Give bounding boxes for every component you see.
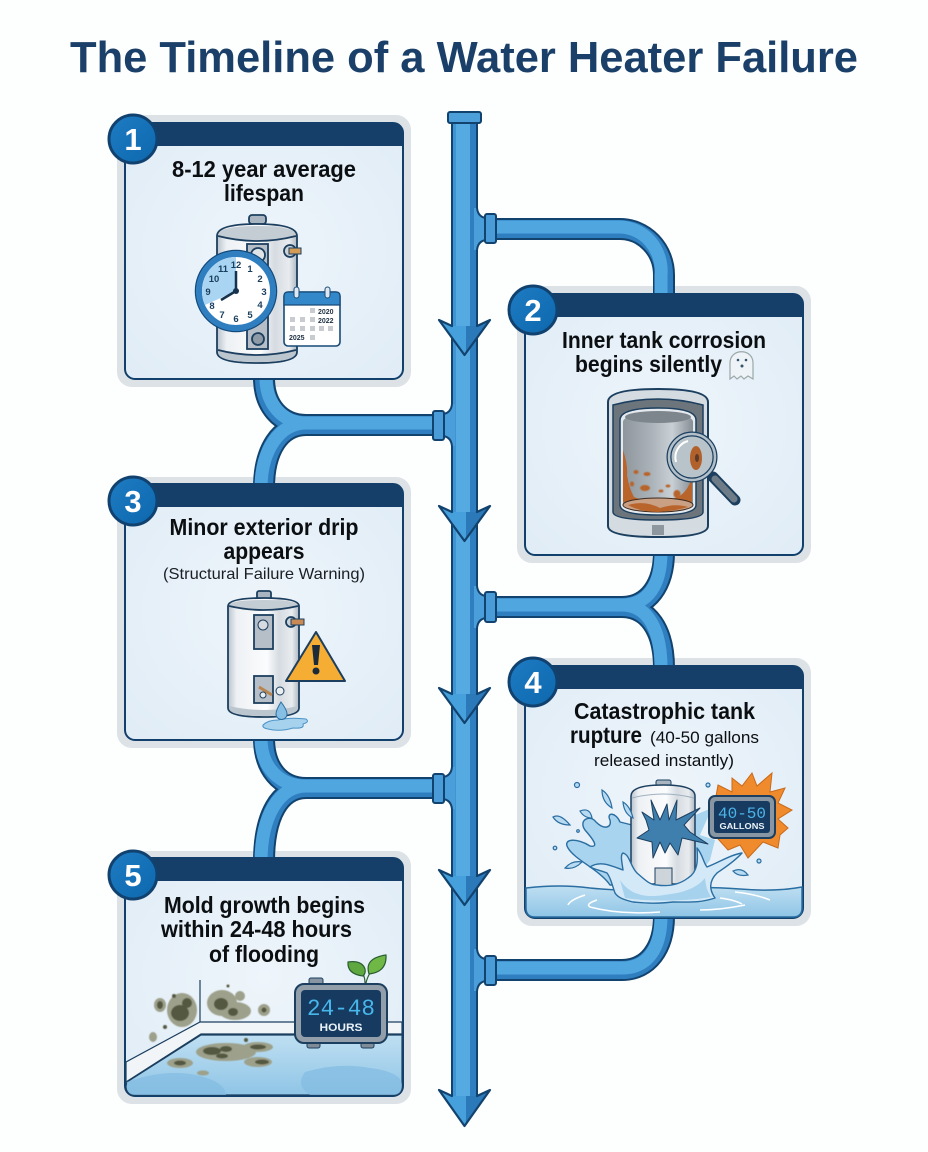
panel 1 heading: lifespan — [224, 180, 304, 206]
icon: cutaway tank — [608, 389, 735, 537]
icon: 24-48 hours clock: HOURS — [320, 1022, 362, 1034]
icon: magnifier — [669, 434, 735, 500]
flow arrows on main pipe — [439, 320, 490, 1126]
panel frames — [117, 115, 811, 1104]
panel 1 header — [125, 123, 403, 146]
room corner and baseboard — [126, 980, 402, 1082]
badge 1 — [109, 115, 157, 163]
icon: ruptured tank — [631, 780, 708, 886]
step badges — [109, 115, 557, 899]
panel 5 heading: within 24-48 hours — [160, 916, 352, 942]
icon: clock: 7 — [219, 310, 225, 321]
panel 4 heading: released instantly) — [594, 752, 734, 770]
badge 2: 2 — [524, 293, 542, 328]
icon: clock: 4 — [257, 300, 263, 311]
icon: clock: 5 — [247, 310, 253, 321]
icon: clock: 12 — [231, 260, 241, 271]
panel 1 heading: 8-12 year average — [172, 156, 356, 182]
mold patches — [149, 984, 273, 1076]
badge 3: 3 — [124, 484, 142, 519]
icon: clock: 11 — [218, 264, 229, 275]
badge 2 — [509, 286, 557, 334]
pipe couplings and tee fillets — [433, 208, 496, 991]
icon: calendar: 2020 — [318, 309, 334, 316]
panel 3: exterior drip — [125, 484, 403, 740]
panel 3 heading: appears — [224, 538, 304, 564]
panel 4 heading — [570, 698, 759, 770]
icon: clock — [196, 250, 276, 332]
badge 1: 1 — [124, 122, 142, 157]
main vertical pipe — [448, 112, 481, 1098]
icon: calendar — [284, 287, 340, 346]
icon: 24-48 hours clock — [295, 978, 387, 1048]
panel 3 header — [125, 484, 403, 507]
panel 5 heading: of flooding — [209, 941, 319, 967]
badge 4: 4 — [524, 665, 542, 700]
icon: clock: 1 — [247, 264, 253, 275]
icon: ghost — [730, 352, 753, 379]
badge 5 — [109, 851, 157, 899]
badge 4 — [509, 658, 557, 706]
panel 3 subheading: (Structural Failure Warning) — [163, 566, 365, 583]
pipe top cap — [448, 112, 481, 123]
panel 2 header — [525, 294, 803, 317]
panel 2 heading: Inner tank corrosion — [562, 327, 766, 353]
panel 2: corrosion — [525, 294, 803, 555]
panel 3 heading — [170, 514, 358, 564]
icon: clock: 9 — [205, 287, 211, 298]
icon: clock: 3 — [261, 287, 267, 298]
panel 2 heading: begins silently — [575, 351, 722, 377]
darker water waves — [127, 1066, 402, 1095]
icon: clock: 6 — [233, 314, 239, 325]
icon: 40-50 gallons display: 40-50 — [718, 805, 766, 823]
icon: 40-50 gallons display: GALLONS — [720, 821, 765, 831]
rust patches — [623, 450, 692, 512]
icon: clock: 2 — [257, 274, 263, 285]
rupture hole — [637, 800, 708, 858]
flood ripples — [568, 892, 770, 913]
icon: burst starburst — [710, 773, 792, 858]
title: The Timeline of a Water Heater Failure — [70, 33, 858, 82]
panel 4 heading: rupture — [570, 722, 642, 748]
icon: calendar: 2022 — [318, 318, 334, 325]
icon: water heater — [217, 215, 301, 363]
icon: back splash — [567, 808, 715, 885]
badge 3 — [109, 477, 157, 525]
icon: calendar: 2025 — [289, 335, 305, 342]
icon: puddle and drop — [263, 702, 307, 730]
panel 5 heading — [160, 892, 365, 967]
panel 2 heading — [562, 327, 766, 377]
icon: flood water — [526, 886, 802, 917]
panel 1: lifespan — [125, 123, 403, 379]
panel 4: rupture — [525, 666, 803, 918]
panel 3 heading: Minor exterior drip — [170, 514, 358, 540]
panel 1 heading — [172, 156, 356, 206]
icon: 40-50 gallons display — [709, 796, 775, 838]
water droplets — [553, 782, 761, 876]
icon: clock: 10 — [209, 274, 219, 285]
panel 4 heading: Catastrophic tank — [574, 698, 755, 724]
icon: clock: 8 — [209, 301, 215, 312]
icon: warning triangle — [286, 632, 345, 681]
panel 4 heading: (40-50 gallons — [650, 729, 759, 747]
icon: sprout leaves — [348, 955, 386, 983]
flood water on floor — [126, 1035, 402, 1095]
pipe branches — [261, 227, 664, 970]
icon: water heater — [228, 591, 304, 717]
panel 4 header — [525, 666, 803, 689]
icon: front water crown — [590, 848, 742, 903]
panel 5: mold — [125, 858, 403, 1096]
badge 5: 5 — [124, 858, 142, 893]
icon: 24-48 hours clock: 24-48 — [307, 996, 375, 1022]
panel 5 heading: Mold growth begins — [164, 892, 365, 918]
panel 5 header — [125, 858, 403, 881]
